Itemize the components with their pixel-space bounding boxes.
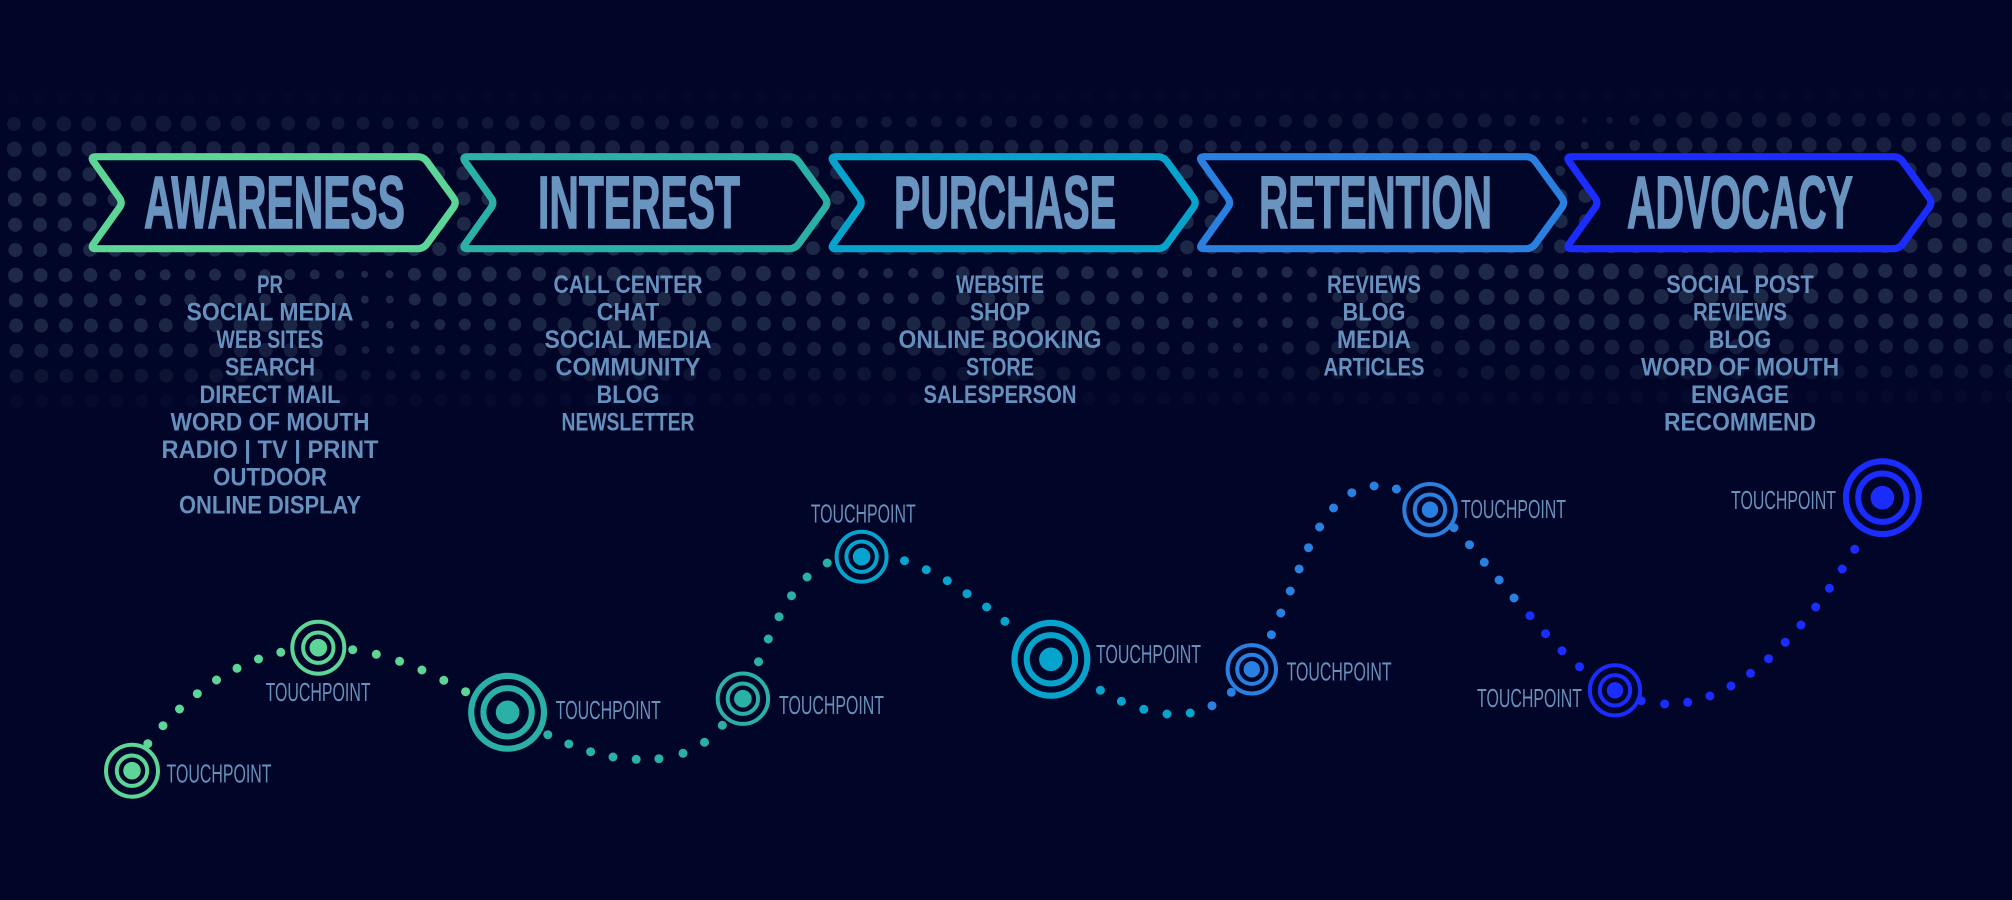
touchpoint 1: TOUCHPOINT — [166, 761, 272, 789]
channel list: advocacy: WORD OF MOUTH — [1641, 354, 1839, 382]
stage arrow: awareness — [92, 157, 455, 249]
touchpoint 10: TOUCHPOINT — [1731, 487, 1836, 515]
channel list: awareness: RADIO | TV | PRINT — [162, 437, 378, 464]
channel list: purchase: SHOP — [970, 300, 1030, 326]
channel list: awareness: PR — [257, 272, 283, 299]
touchpoint 5: TOUCHPOINT — [811, 501, 916, 529]
channel list: purchase: WEBSITE — [956, 272, 1044, 299]
channel list: interest: CALL CENTER — [554, 272, 703, 299]
channel list: interest: CHAT — [597, 300, 659, 326]
dotted journey path: green — [148, 650, 466, 744]
channel list: awareness — [162, 272, 378, 520]
channel list: awareness: OUTDOOR — [213, 464, 327, 492]
channel list: interest: NEWSLETTER — [562, 410, 695, 436]
channel list: interest — [544, 272, 712, 436]
channel list: advocacy: SOCIAL POST — [1666, 272, 1814, 299]
channel list: interest: COMMUNITY — [556, 354, 701, 382]
touchpoint 2: TOUCHPOINT — [266, 679, 371, 707]
touchpoint 4 — [718, 674, 884, 724]
touchpoint 6: TOUCHPOINT — [1096, 641, 1201, 669]
stage arrow: interest: INTEREST — [538, 161, 740, 244]
channel list: purchase: STORE — [966, 354, 1034, 382]
channel list: retention — [1324, 272, 1424, 382]
channel list: awareness: SEARCH — [225, 354, 315, 382]
channel list: purchase — [898, 272, 1102, 409]
channel list: awareness: WEB SITES — [216, 327, 324, 354]
touchpoint 9: TOUCHPOINT — [1477, 685, 1582, 713]
dotted journey path: indigo — [1530, 549, 1855, 704]
channel list: awareness: SOCIAL MEDIA — [186, 300, 354, 326]
touchpoint 4: TOUCHPOINT — [779, 692, 884, 720]
channel list: retention: MEDIA — [1337, 327, 1411, 354]
touchpoint 3: TOUCHPOINT — [556, 697, 661, 725]
touchpoint 5 — [811, 501, 916, 582]
channel list: awareness: DIRECT MAIL — [200, 382, 340, 409]
touchpoint 7: TOUCHPOINT — [1287, 659, 1392, 687]
stage arrow: purchase — [832, 157, 1195, 249]
dotted journey path: blue — [1212, 486, 1514, 706]
channel list: interest: BLOG — [596, 382, 660, 409]
stage arrow: retention — [1201, 157, 1564, 249]
stage arrow: purchase: PURCHASE — [894, 161, 1116, 244]
channel list: purchase: SALESPERSON — [924, 382, 1076, 409]
touchpoint 10 — [1731, 461, 1919, 534]
touchpoint 2 — [266, 622, 371, 707]
channel list: purchase: ONLINE BOOKING — [898, 327, 1102, 354]
channel list: advocacy: BLOG — [1709, 327, 1771, 354]
dotted journey path: teal — [548, 563, 827, 759]
dotted journey path: cyan — [904, 561, 1190, 714]
channel list: advocacy — [1641, 272, 1839, 436]
channel list: advocacy: ENGAGE — [1691, 382, 1789, 409]
stage arrow: retention: RETENTION — [1259, 161, 1492, 244]
touchpoint 6 — [1014, 623, 1201, 696]
channel list: retention: REVIEWS — [1327, 272, 1421, 299]
touchpoint 1 — [106, 745, 272, 797]
stage arrow: interest — [464, 157, 827, 249]
touchpoint 7 — [1228, 645, 1392, 694]
touchpoint 9 — [1477, 665, 1640, 715]
touchpoint 3 — [471, 676, 661, 749]
channel list: advocacy: REVIEWS — [1693, 300, 1787, 326]
touchpoint 8 — [1404, 484, 1566, 535]
channel list: retention: BLOG — [1342, 300, 1406, 326]
channel list: awareness: ONLINE DISPLAY — [179, 492, 361, 520]
stage arrow: advocacy — [1568, 157, 1931, 249]
stage arrow: awareness: AWARENESS — [144, 161, 405, 244]
channel list: advocacy: RECOMMEND — [1664, 410, 1816, 436]
touchpoint 8: TOUCHPOINT — [1461, 496, 1566, 524]
halftone dot background band — [14, 94, 2012, 401]
channel list: awareness: WORD OF MOUTH — [170, 410, 370, 436]
channel list: interest: SOCIAL MEDIA — [544, 327, 712, 354]
channel list: retention: ARTICLES — [1324, 354, 1424, 382]
